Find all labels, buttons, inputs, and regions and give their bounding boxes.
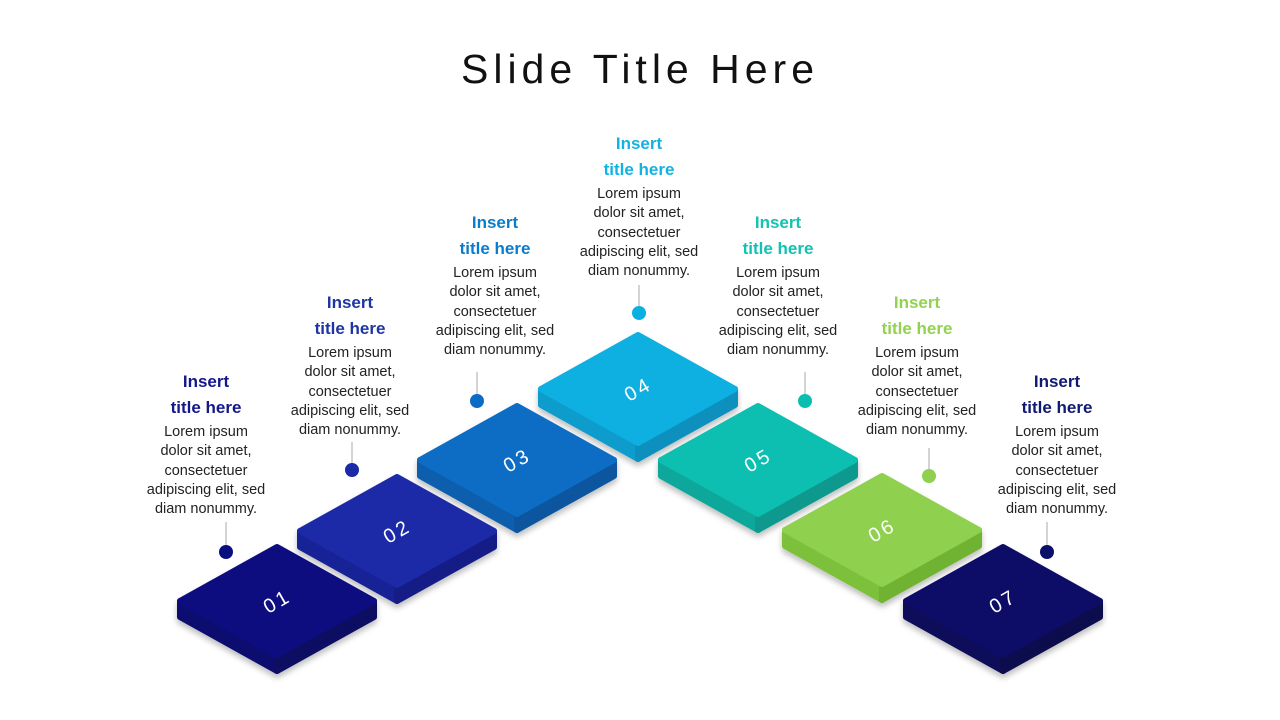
text block 05: diam nonummy. xyxy=(727,342,829,358)
text block 01: diam nonummy. xyxy=(155,501,257,517)
text block 02: consectetuer xyxy=(308,384,392,400)
text block 03: Lorem ipsum xyxy=(453,265,537,281)
text block 01: consectetuer xyxy=(164,463,248,479)
text block 07: adipiscing elit, sed xyxy=(998,482,1116,498)
text block 01: title here xyxy=(171,398,241,416)
text block 01: Insert xyxy=(183,372,229,391)
text block 07: Lorem ipsum xyxy=(1015,424,1099,440)
text block 02: dolor sit amet, xyxy=(304,364,396,380)
text block 01: adipiscing elit, sed xyxy=(147,482,265,498)
text block 07: diam nonummy. xyxy=(1006,501,1108,517)
text block 02: Lorem ipsum xyxy=(308,345,392,361)
text block 02: diam nonummy. xyxy=(299,422,401,438)
text block 02: Insert xyxy=(327,293,373,312)
tile 02: 02 xyxy=(380,515,415,548)
text block 03 xyxy=(436,213,554,358)
text block 05: Insert xyxy=(755,213,801,232)
tile 06: 06 xyxy=(865,514,900,547)
text block 04 xyxy=(580,134,698,279)
text block 04: title here xyxy=(604,160,674,178)
text block 01 xyxy=(147,372,265,517)
text block 05: title here xyxy=(743,238,813,258)
text block 02: adipiscing elit, sed xyxy=(291,403,409,419)
text block 06: dolor sit amet, xyxy=(871,364,963,380)
text block 04: dolor sit amet, xyxy=(593,205,685,221)
tile 05: 05 xyxy=(741,444,776,477)
text block 03: title here xyxy=(460,238,530,258)
title: Slide Title Here xyxy=(461,46,819,92)
tile 07: 07 xyxy=(986,585,1021,618)
text block 04: Lorem ipsum xyxy=(597,186,681,202)
text block 03: adipiscing elit, sed xyxy=(436,323,554,339)
text block 07: consectetuer xyxy=(1015,463,1099,479)
text block 05 xyxy=(719,213,837,358)
text block 03: dolor sit amet, xyxy=(449,284,541,300)
connector pins xyxy=(219,285,1054,559)
text block 05: dolor sit amet, xyxy=(732,284,824,300)
tile 04: 04 xyxy=(621,373,656,406)
text block 01: Lorem ipsum xyxy=(164,424,248,440)
text block 04: consectetuer xyxy=(597,225,681,241)
tile 02 xyxy=(300,477,494,601)
text block 07: Insert xyxy=(1034,372,1080,391)
text block 05: consectetuer xyxy=(736,304,820,320)
text block 03: Insert xyxy=(472,213,518,232)
text block 06 xyxy=(858,293,976,438)
text block 04: diam nonummy. xyxy=(588,263,690,279)
text block 06: adipiscing elit, sed xyxy=(858,403,976,419)
text block 02 xyxy=(291,293,409,438)
tile 01: 01 xyxy=(260,585,295,618)
text block 06: consectetuer xyxy=(875,384,959,400)
tile 06 xyxy=(785,476,979,600)
text block 01: dolor sit amet, xyxy=(160,443,252,459)
text block 05: adipiscing elit, sed xyxy=(719,323,837,339)
text block 04: adipiscing elit, sed xyxy=(580,244,698,260)
text block 02: title here xyxy=(315,318,385,338)
tile 01 xyxy=(180,547,374,671)
tile 04 xyxy=(541,335,735,459)
text block 05: Lorem ipsum xyxy=(736,265,820,281)
tile 05 xyxy=(661,406,855,530)
text block 03: diam nonummy. xyxy=(444,342,546,358)
tile 03 xyxy=(420,406,614,530)
text block 03: consectetuer xyxy=(453,304,537,320)
text block 07: dolor sit amet, xyxy=(1011,443,1103,459)
tile 03: 03 xyxy=(500,444,535,477)
text block 06: Lorem ipsum xyxy=(875,345,959,361)
text block 06: title here xyxy=(882,318,952,338)
text block 07 xyxy=(998,372,1116,517)
text block 06: Insert xyxy=(894,293,940,312)
tile 07 xyxy=(906,547,1100,671)
text block 06: diam nonummy. xyxy=(866,422,968,438)
text block 04: Insert xyxy=(616,134,662,153)
text block 07: title here xyxy=(1022,398,1092,416)
